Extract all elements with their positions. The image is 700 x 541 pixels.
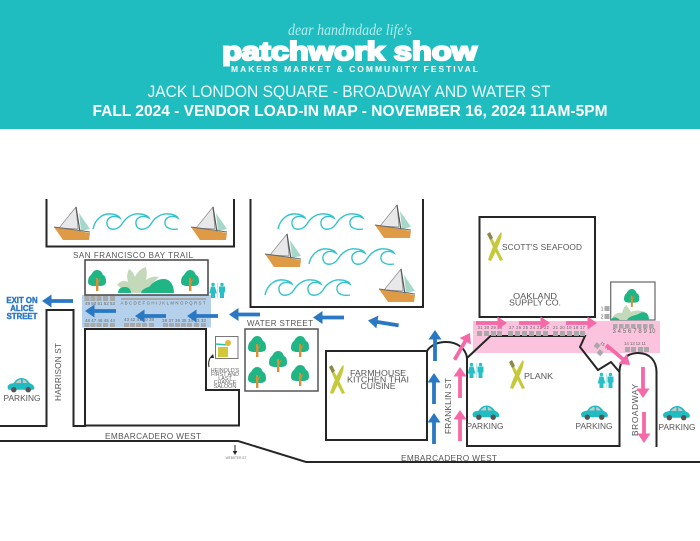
label: Franklin St: FRANKLIN ST xyxy=(443,378,453,434)
parking Franklin: PARKING xyxy=(466,421,504,431)
panel: west park xyxy=(85,260,208,295)
east zone vendor spaces: 21 20 19 18 17 xyxy=(553,325,586,330)
restroom icon: Plank east xyxy=(598,373,614,388)
west zone vendor spaces: 38 37 36 35 34 33 32 xyxy=(162,318,207,323)
pink load-in arrows xyxy=(449,316,650,443)
Scott's Seafood: SCOTT'S SEAFOOD xyxy=(502,242,582,252)
Plank: PLANK xyxy=(524,371,553,381)
panel: bay east xyxy=(265,205,415,302)
patchwork show logo: patchwork show xyxy=(222,36,478,66)
parking Plank east xyxy=(576,406,612,431)
header banner xyxy=(0,0,700,129)
panel: east park xyxy=(611,282,655,320)
west zone vendor spaces: A B C D E F G H I J K L M N O P Q R S T xyxy=(120,300,206,306)
location line: JACK LONDON SQUARE - BROADWAY AND WATER ST xyxy=(148,83,550,101)
west zone vendor spaces: 49 50 51 52 53 xyxy=(85,301,116,306)
panel: Heinold's saloon: LAST xyxy=(218,376,232,382)
exit callout: STREET xyxy=(7,312,38,321)
pink load-in zone xyxy=(473,321,660,353)
parking west xyxy=(4,378,40,403)
street and building outlines xyxy=(0,199,700,462)
label: San Francisco Bay Trail: SAN FRANCISCO BAY TRAIL xyxy=(73,251,194,260)
restroom icon: Franklin xyxy=(468,363,484,378)
Farmhouse Kitchen xyxy=(329,365,409,394)
panel: Heinold's saloon: SALOON xyxy=(214,384,236,390)
west zone vendor spaces: 48 47 46 45 44 xyxy=(85,318,116,323)
east zone vendor spaces: 15 16 xyxy=(599,340,611,352)
panel: San Francisco bay west xyxy=(54,207,227,240)
east zone vendor spaces: 14 13 12 11 xyxy=(624,341,647,346)
Scott's Seafood xyxy=(487,232,582,261)
panel: Heinold's saloon: CHANCE xyxy=(214,380,237,386)
Farmhouse Kitchen: KITCHEN THAI xyxy=(347,376,409,384)
script tagline: dear handmdade life's xyxy=(288,22,412,39)
panel: Heinold's saloon: FIRST AND xyxy=(211,372,239,378)
Oakland Supply Co.: OAKLAND xyxy=(513,292,557,301)
label: Water Street: WATER STREET xyxy=(247,319,313,328)
label: Broadway: BROADWAY xyxy=(630,384,640,436)
Farmhouse Kitchen: CUISINE xyxy=(360,382,396,391)
parking west: PARKING xyxy=(4,393,40,403)
east zone vendor spaces: 27 26 25 24 23 22 xyxy=(509,325,550,330)
west zone vendor spaces: 43 42 41 40 39 xyxy=(124,317,155,322)
panel: Water Street trees xyxy=(245,329,318,391)
Webster St marker: WEBSTER ST xyxy=(226,456,246,460)
east zone vendor spaces: 2 xyxy=(600,314,604,320)
date line: FALL 2024 - VENDOR LOAD-IN MAP - NOVEMBER 16, 2024 11AM-5PM xyxy=(92,103,608,120)
west zone vendor spaces xyxy=(84,296,207,327)
parking Broadway: PARKING xyxy=(658,422,696,432)
exit callout: ALICE xyxy=(10,304,34,313)
Farmhouse Kitchen: FARMHOUSE xyxy=(350,369,406,378)
Plank xyxy=(509,360,553,389)
panel: Heinold's saloon xyxy=(209,336,240,390)
east zone vendor spaces: 3 4 5 6 7 8 9 10 xyxy=(612,329,656,335)
panel: Heinold's saloon: HEINOLD'S xyxy=(211,368,240,374)
Webster St marker xyxy=(226,445,246,460)
east zone vendor spaces: 31 30 29 28 xyxy=(478,325,503,330)
label: Embarcadero West (west): EMBARCADERO WEST xyxy=(105,431,201,441)
exit callout: EXIT ON xyxy=(6,296,38,305)
label: Embarcadero West (east): EMBARCADERO WEST xyxy=(401,453,497,463)
festival subtitle: MAKERS MARKET & COMMUNITY FESTIVAL xyxy=(231,64,478,74)
Oakland Supply Co.: SUPPLY CO. xyxy=(509,298,561,308)
east zone vendor spaces: 1 xyxy=(600,306,604,312)
Oakland Supply Co. xyxy=(509,292,561,308)
label: Harrison St: HARRISON ST xyxy=(53,343,63,401)
parking Plank east: PARKING xyxy=(576,421,612,431)
blue load-in zone xyxy=(82,295,211,328)
parking Broadway xyxy=(658,406,696,432)
parking Franklin xyxy=(466,406,504,431)
east zone vendor spaces xyxy=(477,306,656,356)
blue load-in arrows xyxy=(42,294,442,444)
restroom icon: west xyxy=(209,283,225,298)
